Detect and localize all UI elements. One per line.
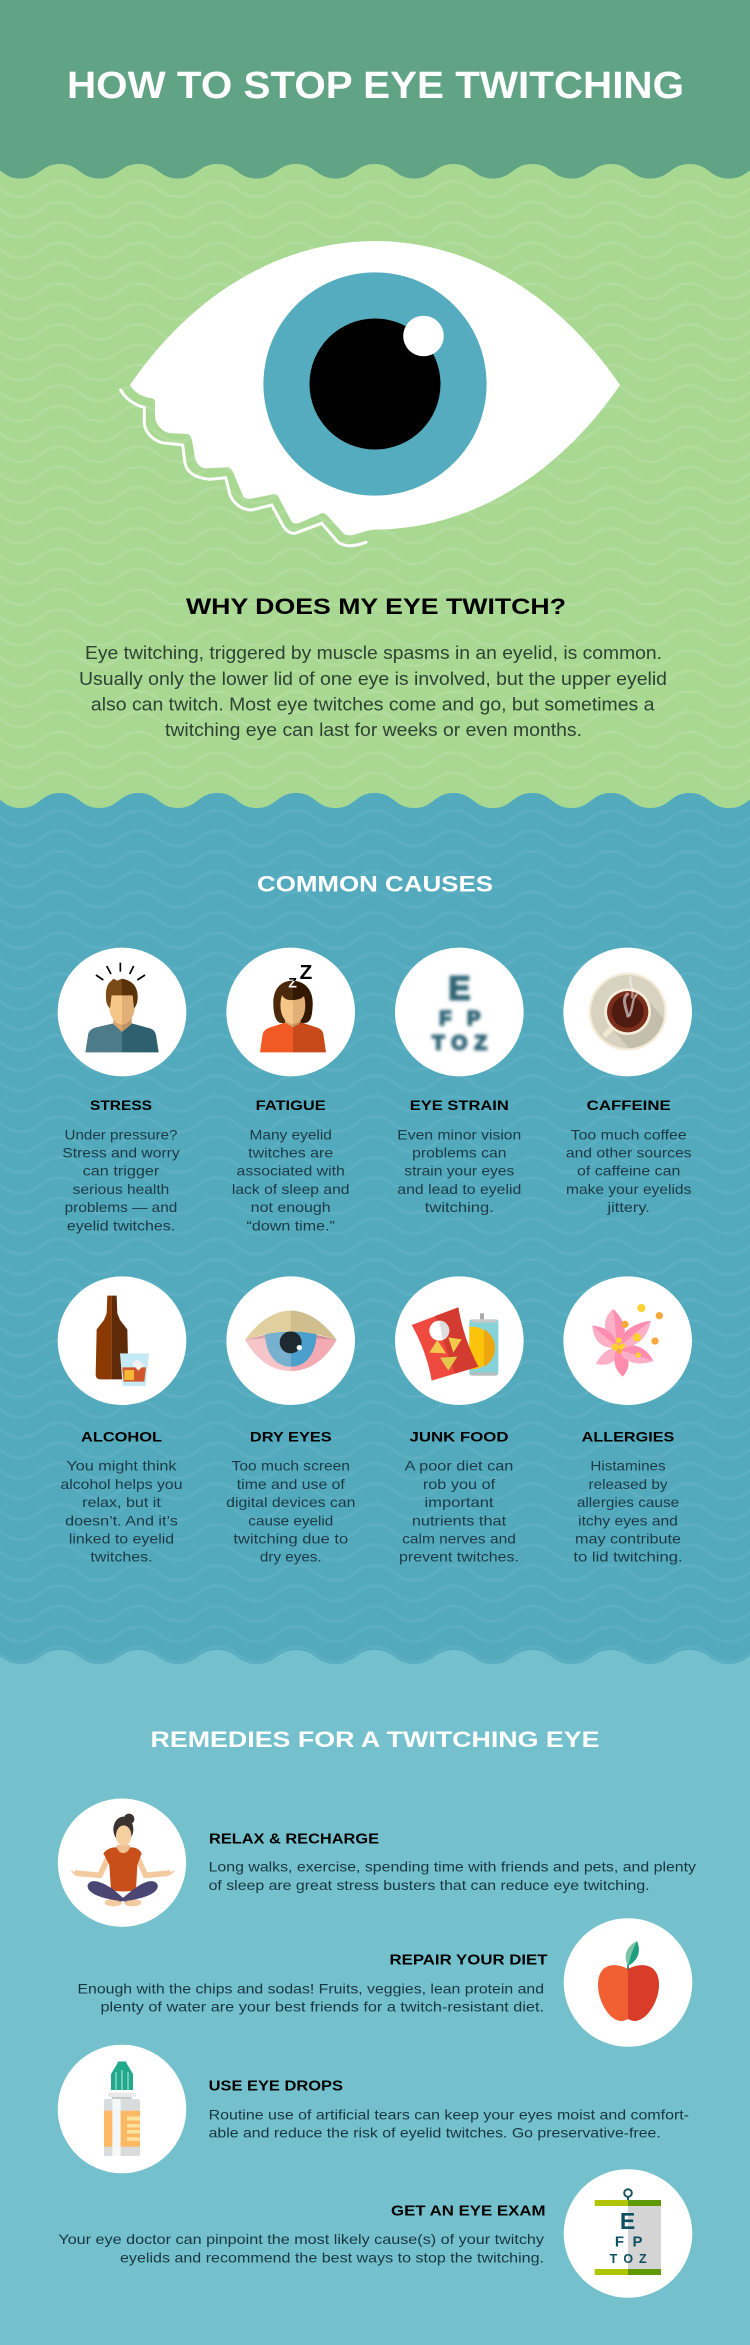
panel: remedies bbox=[0, 1640, 750, 2345]
text: use eye drops bbox=[209, 2106, 689, 2141]
icon: tired woman bbox=[226, 948, 355, 1076]
label: relax and recharge: RELAX & RECHARGE bbox=[209, 1830, 379, 1847]
text: intro paragraph: also can twitch. Most eye twitches come and go, but sometimes a bbox=[91, 695, 656, 715]
text: get an eye exam: Your eye doctor can pinpoint the most likely cause(s) of your twitchy bbox=[58, 2231, 544, 2247]
text: allergies: to lid twitching. bbox=[573, 1549, 683, 1565]
text: caffeine bbox=[566, 1126, 692, 1215]
label: junk food: JUNK FOOD bbox=[410, 1429, 508, 1445]
remedy: use eye drops bbox=[58, 2045, 689, 2173]
card: caffeine bbox=[563, 948, 692, 1215]
remedy: relax and recharge bbox=[58, 1798, 696, 1927]
text: repair your diet: Enough with the chips and sodas! Fruits, veggies, lean protein and bbox=[78, 1980, 544, 1996]
text: allergies: released by bbox=[588, 1476, 668, 1492]
text: allergies: itchy eyes and bbox=[578, 1512, 678, 1528]
text: dry eyes bbox=[226, 1458, 355, 1565]
icon: chips and soda bbox=[395, 1276, 524, 1405]
icon: eye chart: P bbox=[632, 2234, 643, 2251]
text: caffeine: Too much coffee bbox=[571, 1126, 687, 1142]
text: eye strain: and lead to eyelid bbox=[397, 1181, 521, 1197]
icon: blurry eye chart bbox=[395, 948, 524, 1076]
icon: tired woman: Z bbox=[300, 961, 313, 984]
label: dry eyes: DRY EYES bbox=[250, 1429, 332, 1445]
text: stress bbox=[62, 1126, 180, 1233]
title: HOW TO STOP EYE TWITCHING bbox=[67, 65, 684, 107]
text: eye strain bbox=[397, 1126, 521, 1215]
text: relax and recharge bbox=[209, 1859, 696, 1893]
text: intro paragraph: Usually only the lower lid of one eye is involved, but the upper eyelid bbox=[79, 669, 667, 689]
icon: blurry eye chart: P bbox=[467, 1008, 480, 1030]
text: junk food: rob you of bbox=[423, 1476, 495, 1492]
icon: blurry eye chart: O bbox=[451, 1031, 467, 1054]
text: dry eyes: twitching due to bbox=[233, 1530, 348, 1546]
text: get an eye exam: eyelids and recommend the best ways to stop the twitching. bbox=[120, 2249, 544, 2265]
text: stress: eyelid twitches. bbox=[67, 1217, 175, 1233]
text: relax and recharge: Long walks, exercise, spending time with friends and pets, and plenty bbox=[209, 1859, 696, 1875]
text: caffeine: of caffeine can bbox=[577, 1163, 680, 1179]
text: allergies: may contribute bbox=[575, 1530, 681, 1546]
text: caffeine: and other sources bbox=[566, 1144, 692, 1160]
label: caffeine: CAFFEINE bbox=[587, 1097, 671, 1113]
text: alcohol: doesn’t. And it’s bbox=[65, 1512, 178, 1528]
label: stress: STRESS bbox=[90, 1097, 152, 1113]
text: fatigue: lack of sleep and bbox=[232, 1181, 350, 1197]
icon: eye chart: O bbox=[623, 2252, 633, 2266]
text: caffeine: jittery. bbox=[606, 1199, 650, 1215]
card: stress bbox=[58, 948, 186, 1233]
text: junk food: nutrients that bbox=[412, 1512, 506, 1528]
heading: why does my eye twitch: WHY DOES MY EYE TWITCH? bbox=[186, 594, 566, 619]
text: junk food: calm nerves and bbox=[402, 1530, 516, 1546]
text: dry eyes: cause eyelid bbox=[248, 1512, 333, 1528]
text: fatigue: Many eyelid bbox=[250, 1126, 332, 1142]
icon: eye chart bbox=[564, 2169, 692, 2298]
text: get an eye exam bbox=[58, 2231, 544, 2265]
text: dry eyes: digital devices can bbox=[226, 1494, 355, 1510]
text: eye strain: problems can bbox=[412, 1144, 506, 1160]
text: junk food: prevent twitches. bbox=[399, 1549, 519, 1565]
text: alcohol: relax, but it bbox=[82, 1494, 161, 1510]
icon: eye chart: F bbox=[615, 2234, 624, 2251]
label: use eye drops: USE EYE DROPS bbox=[209, 2078, 343, 2095]
icon: eye drop bottle bbox=[58, 2045, 186, 2173]
text: dry eyes: Too much screen bbox=[232, 1458, 350, 1474]
text: alcohol: linked to eyelid bbox=[69, 1530, 174, 1546]
text: allergies bbox=[573, 1458, 683, 1565]
text: allergies: allergies cause bbox=[577, 1494, 679, 1510]
text: alcohol: twitches. bbox=[90, 1549, 153, 1565]
text: relax and recharge: of sleep are great stress busters that can reduce eye twitching. bbox=[209, 1877, 650, 1893]
panel: common causes bbox=[0, 780, 750, 1664]
text: alcohol bbox=[60, 1458, 182, 1565]
label: get an eye exam: GET AN EYE EXAM bbox=[391, 2202, 546, 2219]
text: stress: problems — and bbox=[65, 1199, 177, 1215]
icon: tired woman: Z bbox=[288, 974, 297, 990]
text: junk food: important bbox=[424, 1494, 494, 1510]
card: allergies bbox=[563, 1276, 692, 1565]
card: alcohol bbox=[58, 1276, 186, 1565]
card: fatigue bbox=[226, 948, 355, 1233]
panel: why does my eye twitch bbox=[0, 150, 750, 808]
icon: coffee cup bbox=[563, 948, 692, 1076]
text: intro paragraph: twitching eye can last for weeks or even months. bbox=[165, 720, 582, 740]
remedy: get an eye exam bbox=[58, 2169, 692, 2298]
text: dry eyes: time and use of bbox=[237, 1476, 345, 1492]
text: use eye drops: Routine use of artificial tears can keep your eyes moist and comfort- bbox=[209, 2106, 689, 2122]
label: repair your diet: REPAIR YOUR DIET bbox=[390, 1951, 548, 1968]
icon: eye chart: E bbox=[620, 2208, 635, 2234]
text: junk food bbox=[399, 1458, 519, 1565]
icon: apple bbox=[564, 1918, 692, 2047]
heading: common causes: COMMON CAUSES bbox=[257, 872, 493, 897]
text: eye strain: twitching. bbox=[425, 1199, 494, 1215]
text: alcohol: You might think bbox=[66, 1458, 178, 1474]
icon: blurry eye chart: T bbox=[432, 1031, 445, 1054]
icon: tired woman: Z bbox=[288, 974, 297, 990]
text: alcohol: alcohol helps you bbox=[60, 1476, 182, 1492]
icon: meditating woman bbox=[58, 1798, 186, 1927]
panel: header bbox=[0, 0, 750, 178]
text: allergies: Histamines bbox=[590, 1458, 666, 1474]
label: eye strain: EYE STRAIN bbox=[410, 1097, 509, 1113]
label: fatigue: FATIGUE bbox=[256, 1097, 326, 1113]
text: fatigue bbox=[232, 1126, 350, 1233]
text: junk food: A poor diet can bbox=[405, 1458, 513, 1474]
text: fatigue: “down time.” bbox=[247, 1217, 335, 1233]
card: junk food bbox=[395, 1276, 524, 1565]
icon: red dry eye bbox=[226, 1276, 355, 1405]
text: fatigue: twitches are bbox=[248, 1144, 333, 1160]
text: intro paragraph bbox=[79, 643, 667, 740]
text: eye strain: strain your eyes bbox=[404, 1163, 514, 1179]
text: repair your diet: plenty of water are your best friends for a twitch-resistant diet. bbox=[100, 1999, 544, 2015]
icon: blurry eye chart: F bbox=[439, 1008, 451, 1030]
icon: stressed man bbox=[58, 948, 186, 1076]
text: eye strain: Even minor vision bbox=[397, 1126, 521, 1142]
label: allergies: ALLERGIES bbox=[582, 1429, 674, 1445]
text: repair your diet bbox=[78, 1980, 544, 2015]
icon: blurry eye chart: E bbox=[448, 969, 470, 1006]
text: use eye drops: able and reduce the risk of eyelid twitches. Go preservative-free. bbox=[209, 2125, 661, 2141]
card: dry eyes bbox=[226, 1276, 355, 1565]
icon: flower with pollen bbox=[563, 1276, 692, 1405]
text: stress: serious health bbox=[73, 1181, 169, 1197]
label: alcohol: ALCOHOL bbox=[81, 1429, 163, 1445]
text: intro paragraph: Eye twitching, triggered by muscle spasms in an eyelid, is common. bbox=[85, 643, 662, 663]
icon: blurry eye chart: Z bbox=[474, 1031, 487, 1054]
text: fatigue: associated with bbox=[237, 1163, 345, 1179]
text: stress: can trigger bbox=[83, 1163, 160, 1179]
illustration: twitching eye bbox=[121, 241, 620, 546]
text: stress: Under pressure? bbox=[64, 1126, 178, 1142]
icon: eye chart: T bbox=[610, 2252, 618, 2266]
icon: eye chart: Z bbox=[639, 2252, 647, 2266]
heading: remedies: REMEDIES FOR A TWITCHING EYE bbox=[150, 1727, 600, 1752]
remedy: repair your diet bbox=[78, 1918, 692, 2047]
text: stress: Stress and worry bbox=[62, 1144, 180, 1160]
text: fatigue: not enough bbox=[251, 1199, 331, 1215]
card: eye strain bbox=[395, 948, 524, 1215]
icon: bottle and glass bbox=[58, 1276, 186, 1405]
text: caffeine: make your eyelids bbox=[566, 1181, 691, 1197]
text: dry eyes: dry eyes. bbox=[260, 1549, 322, 1565]
